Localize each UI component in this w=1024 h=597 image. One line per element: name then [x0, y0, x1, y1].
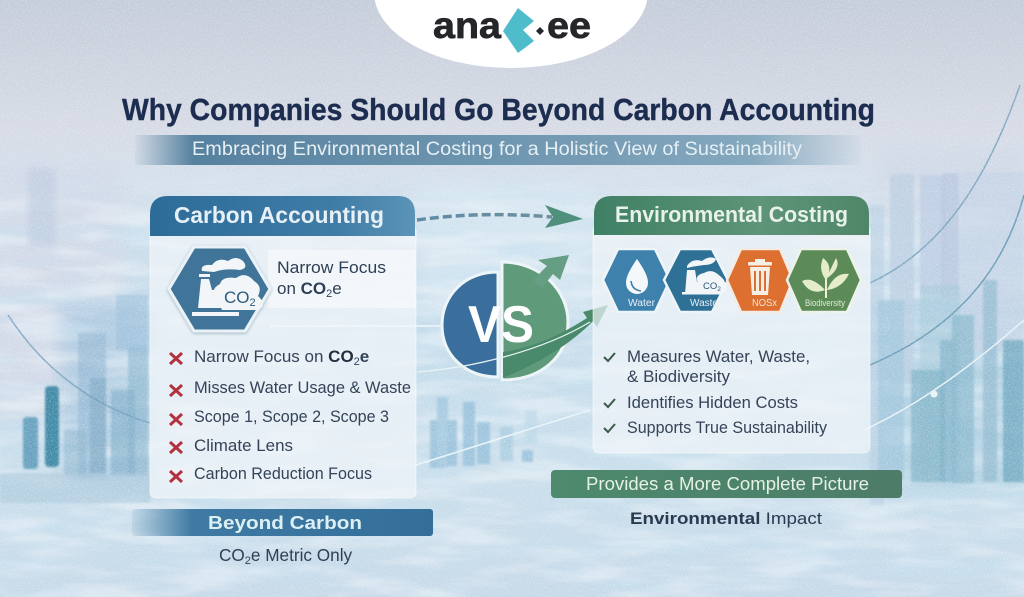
panel header [594, 196, 869, 235]
logo badge [374, 0, 648, 68]
panel heading: Environmental Costing [615, 202, 848, 227]
connector line [270, 325, 444, 327]
banner text: Beyond Carbon [208, 512, 362, 533]
logo wordmark: ee: ee [547, 5, 591, 46]
caption: CO2e metric only: e Metric Only [251, 545, 353, 565]
logo wordmark: ana: ana [433, 5, 501, 46]
swoosh highlight [417, 322, 590, 372]
icon: factory with CO2 [169, 247, 270, 331]
icon: waste: CO [703, 281, 717, 292]
callout: on CO2e: on CO [277, 279, 326, 298]
middle faded bars [430, 397, 537, 468]
bullet: climate lens: Climate Lens [194, 437, 293, 455]
panel: carbon accounting [150, 196, 416, 498]
icon: biodiversity [787, 249, 861, 312]
vs blue half [442, 272, 498, 377]
vs badge [417, 255, 608, 380]
panel heading: Carbon Accounting [174, 202, 384, 228]
vs text: VS [468, 296, 534, 354]
water texture [0, 200, 1024, 597]
banner: beyond carbon [132, 509, 433, 536]
arrow: small up arrow [533, 255, 569, 288]
subtitle text: Embracing Environmental Costing for a Holistic View of Sustainability [192, 139, 803, 160]
bullet: measures: Measures Water, Waste, [627, 348, 810, 366]
subtitle band [135, 135, 861, 165]
panel header [150, 196, 415, 236]
background trend curves [8, 85, 1024, 465]
logo dot [536, 27, 544, 35]
icon: NOSx bin [727, 249, 793, 312]
right city bars [870, 172, 1024, 505]
bullet: narrow focus: Narrow Focus on CO [194, 347, 354, 366]
caption: CO2e metric only: 2 [245, 555, 251, 567]
icon: waste: 2 [717, 286, 721, 293]
icon: waste [664, 249, 728, 312]
arrow: dashed comparison [417, 205, 583, 228]
panel: environmental costing [593, 196, 870, 453]
left city bars [0, 168, 150, 503]
icon: biodiversity: Biodiversity [805, 298, 845, 309]
bullet: hidden costs: Identifies Hidden Costs [627, 394, 798, 412]
icon: factory with CO2: CO [224, 288, 250, 307]
icon: water [603, 249, 670, 312]
icon: factory with CO2: 2 [250, 297, 256, 309]
logo mark [503, 8, 534, 53]
icon: NOSx bin: NOSx [752, 298, 777, 309]
bullet: misses water: Misses Water Usage & Waste [194, 379, 411, 397]
callout: narrow focus: Narrow Focus [277, 259, 386, 277]
vs green half [502, 262, 568, 380]
bullet: carbon reduction: Carbon Reduction Focus [194, 465, 372, 483]
bullet: measures: & Biodiversity [627, 368, 731, 386]
banner text: Provides a More Complete Picture [586, 474, 869, 494]
caption: environmental impact: Environmental Impact [630, 509, 822, 528]
highlight strip [268, 250, 416, 308]
bullet: scopes: Scope 1, Scope 2, Scope 3 [194, 408, 389, 426]
callout: on CO2e: e [332, 279, 342, 298]
callout: on CO2e: 2 [326, 288, 332, 300]
title: Why Companies Should Go Beyond Carbon Accounting [122, 92, 875, 127]
arrow: growth swoosh [503, 305, 608, 378]
bullet: measures [604, 348, 810, 386]
banner: complete picture [551, 470, 902, 498]
bullet: narrow focus: e [360, 347, 369, 366]
icon: waste: Waste [690, 298, 718, 309]
caption: CO2e metric only: CO [219, 545, 245, 565]
bullet: narrow focus: 2 [354, 356, 360, 368]
bullet list: benefits [604, 348, 828, 437]
bullet list: limitations [170, 347, 411, 483]
icon: water: Water [628, 298, 656, 309]
bullet: true sustainability: Supports True Sustainability [627, 419, 828, 437]
